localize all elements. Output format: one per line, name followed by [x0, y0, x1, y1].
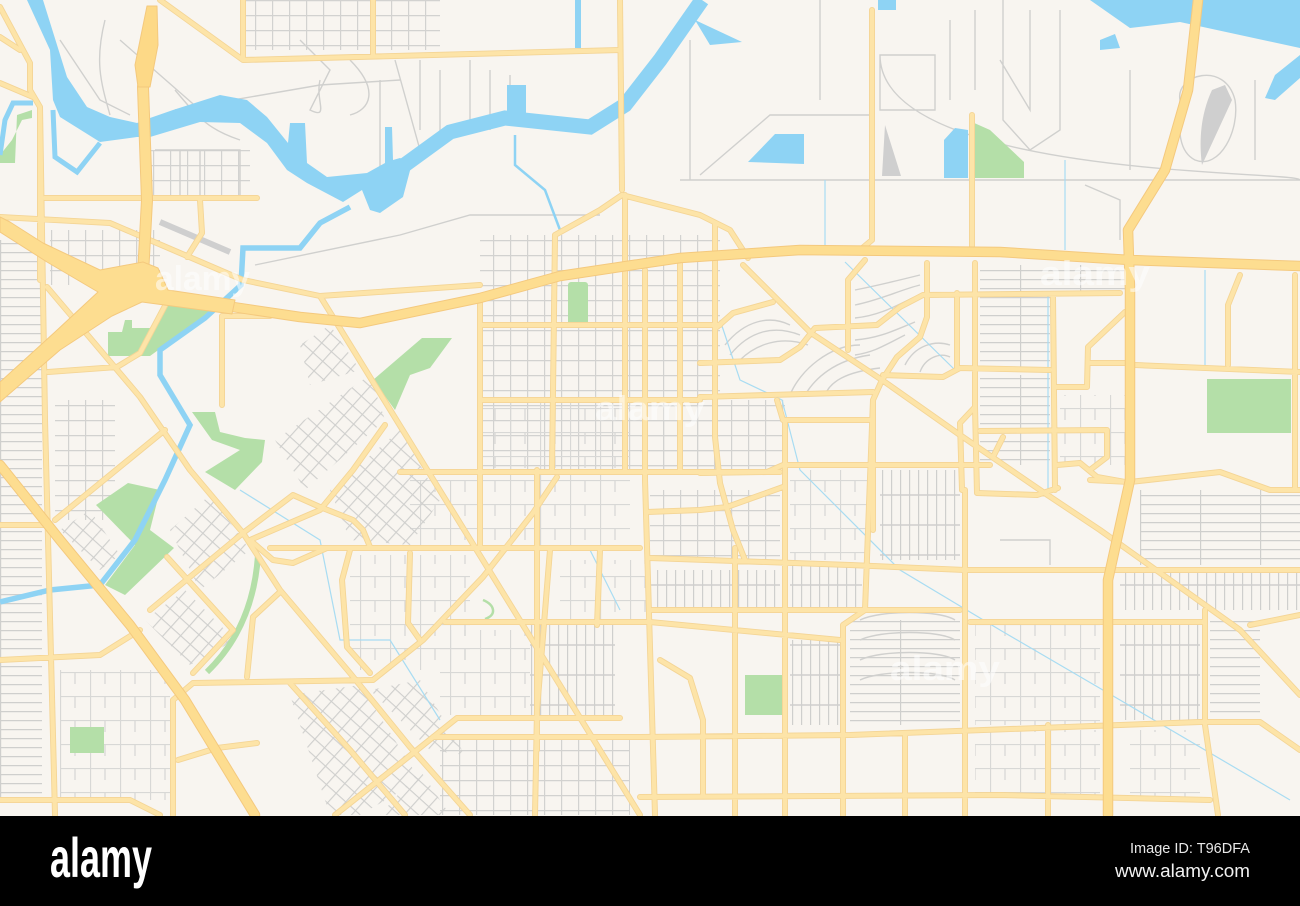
footer bar: [0, 816, 1300, 906]
watermark: [155, 255, 1150, 688]
watermark: alamy: [155, 260, 250, 298]
rail yards: [882, 85, 1232, 176]
watermark: alamy: [890, 650, 1000, 688]
highway widening: [135, 6, 158, 87]
image id: Image ID: T96DFA: [1130, 840, 1250, 857]
alamy logo: alamy: [50, 826, 152, 889]
watermark: alamy: [595, 390, 705, 428]
website: www.alamy.com: [1114, 861, 1250, 881]
interchange: [0, 217, 235, 402]
curved residential streets: [60, 0, 1300, 680]
parks: [0, 110, 1291, 753]
watermark: alamy: [1040, 255, 1150, 293]
